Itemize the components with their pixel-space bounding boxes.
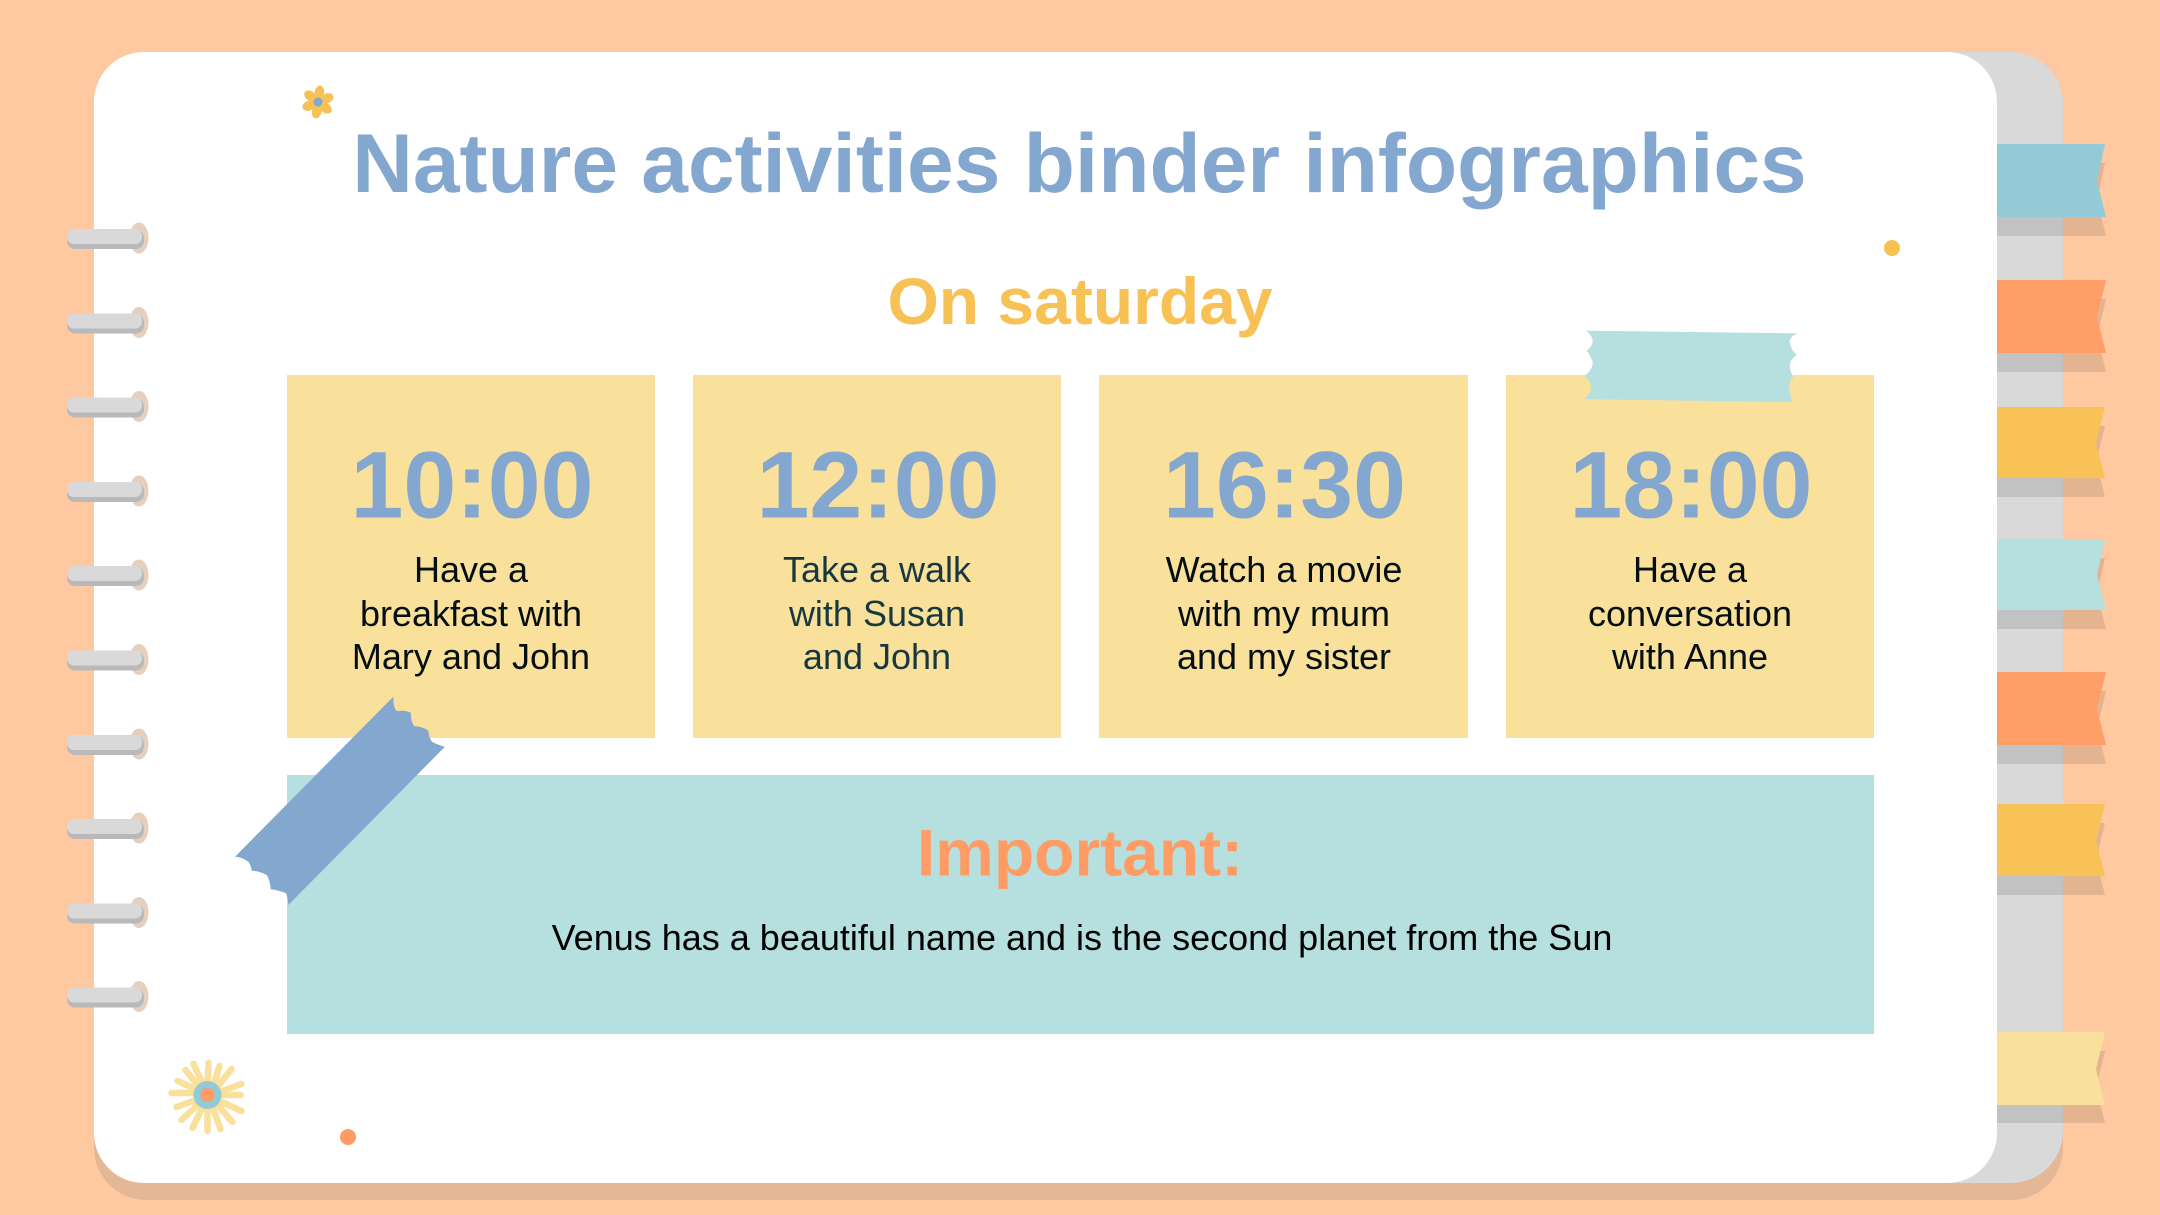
tab 7 pale yellow <box>1997 1032 2105 1123</box>
icon: sun flower <box>172 1063 242 1131</box>
title: Nature activities binder infographics <box>352 116 1807 210</box>
card text: conversation <box>1588 593 1792 634</box>
card: 18:00: 18:00 <box>1570 432 1812 538</box>
card: 16:30: 16:30 <box>1163 432 1406 538</box>
card text: and John <box>803 636 951 677</box>
card text: Watch a movie <box>1166 549 1402 590</box>
washi tape: blue <box>235 697 445 905</box>
washi tape: teal <box>1584 331 1797 402</box>
card: 16:30 <box>1099 375 1468 738</box>
tab 3 yellow <box>1997 407 2105 497</box>
binder rings <box>67 222 148 1012</box>
card: 10:00: 10:00 <box>351 432 593 538</box>
card: 10:00 <box>287 375 655 738</box>
binder cover back <box>1800 52 2063 1183</box>
card: 18:00 <box>1506 375 1874 738</box>
card text: Have a <box>1633 549 1748 590</box>
important text: Venus has a beautiful name and is the second planet from the Sun <box>552 917 1612 958</box>
important heading: Important: <box>917 816 1243 890</box>
icon: small flower <box>299 83 337 121</box>
decorative dot yellow <box>1884 240 1900 256</box>
card text: with Anne <box>1611 636 1768 677</box>
tab 2 orange <box>1997 280 2106 372</box>
card text: with my mum <box>1177 593 1390 634</box>
card text: breakfast with <box>360 593 582 634</box>
card text: Take a walk <box>783 549 972 590</box>
card text: and my sister <box>1177 636 1391 677</box>
card text: Mary and John <box>352 636 590 677</box>
panel: important <box>287 775 1874 1034</box>
card: 12:00 <box>693 375 1061 738</box>
card text: Have a <box>414 549 529 590</box>
card: 12:00: 12:00 <box>757 432 999 538</box>
tab 6 yellow <box>1997 804 2105 895</box>
tab 5 orange <box>1997 672 2106 764</box>
tab 4 light teal <box>1997 539 2106 629</box>
tabs <box>1997 144 2106 1123</box>
subtitle: On saturday <box>887 264 1273 338</box>
card text: with Susan <box>788 593 965 634</box>
decorative dot orange <box>340 1129 356 1145</box>
tab 1 teal <box>1997 144 2106 236</box>
